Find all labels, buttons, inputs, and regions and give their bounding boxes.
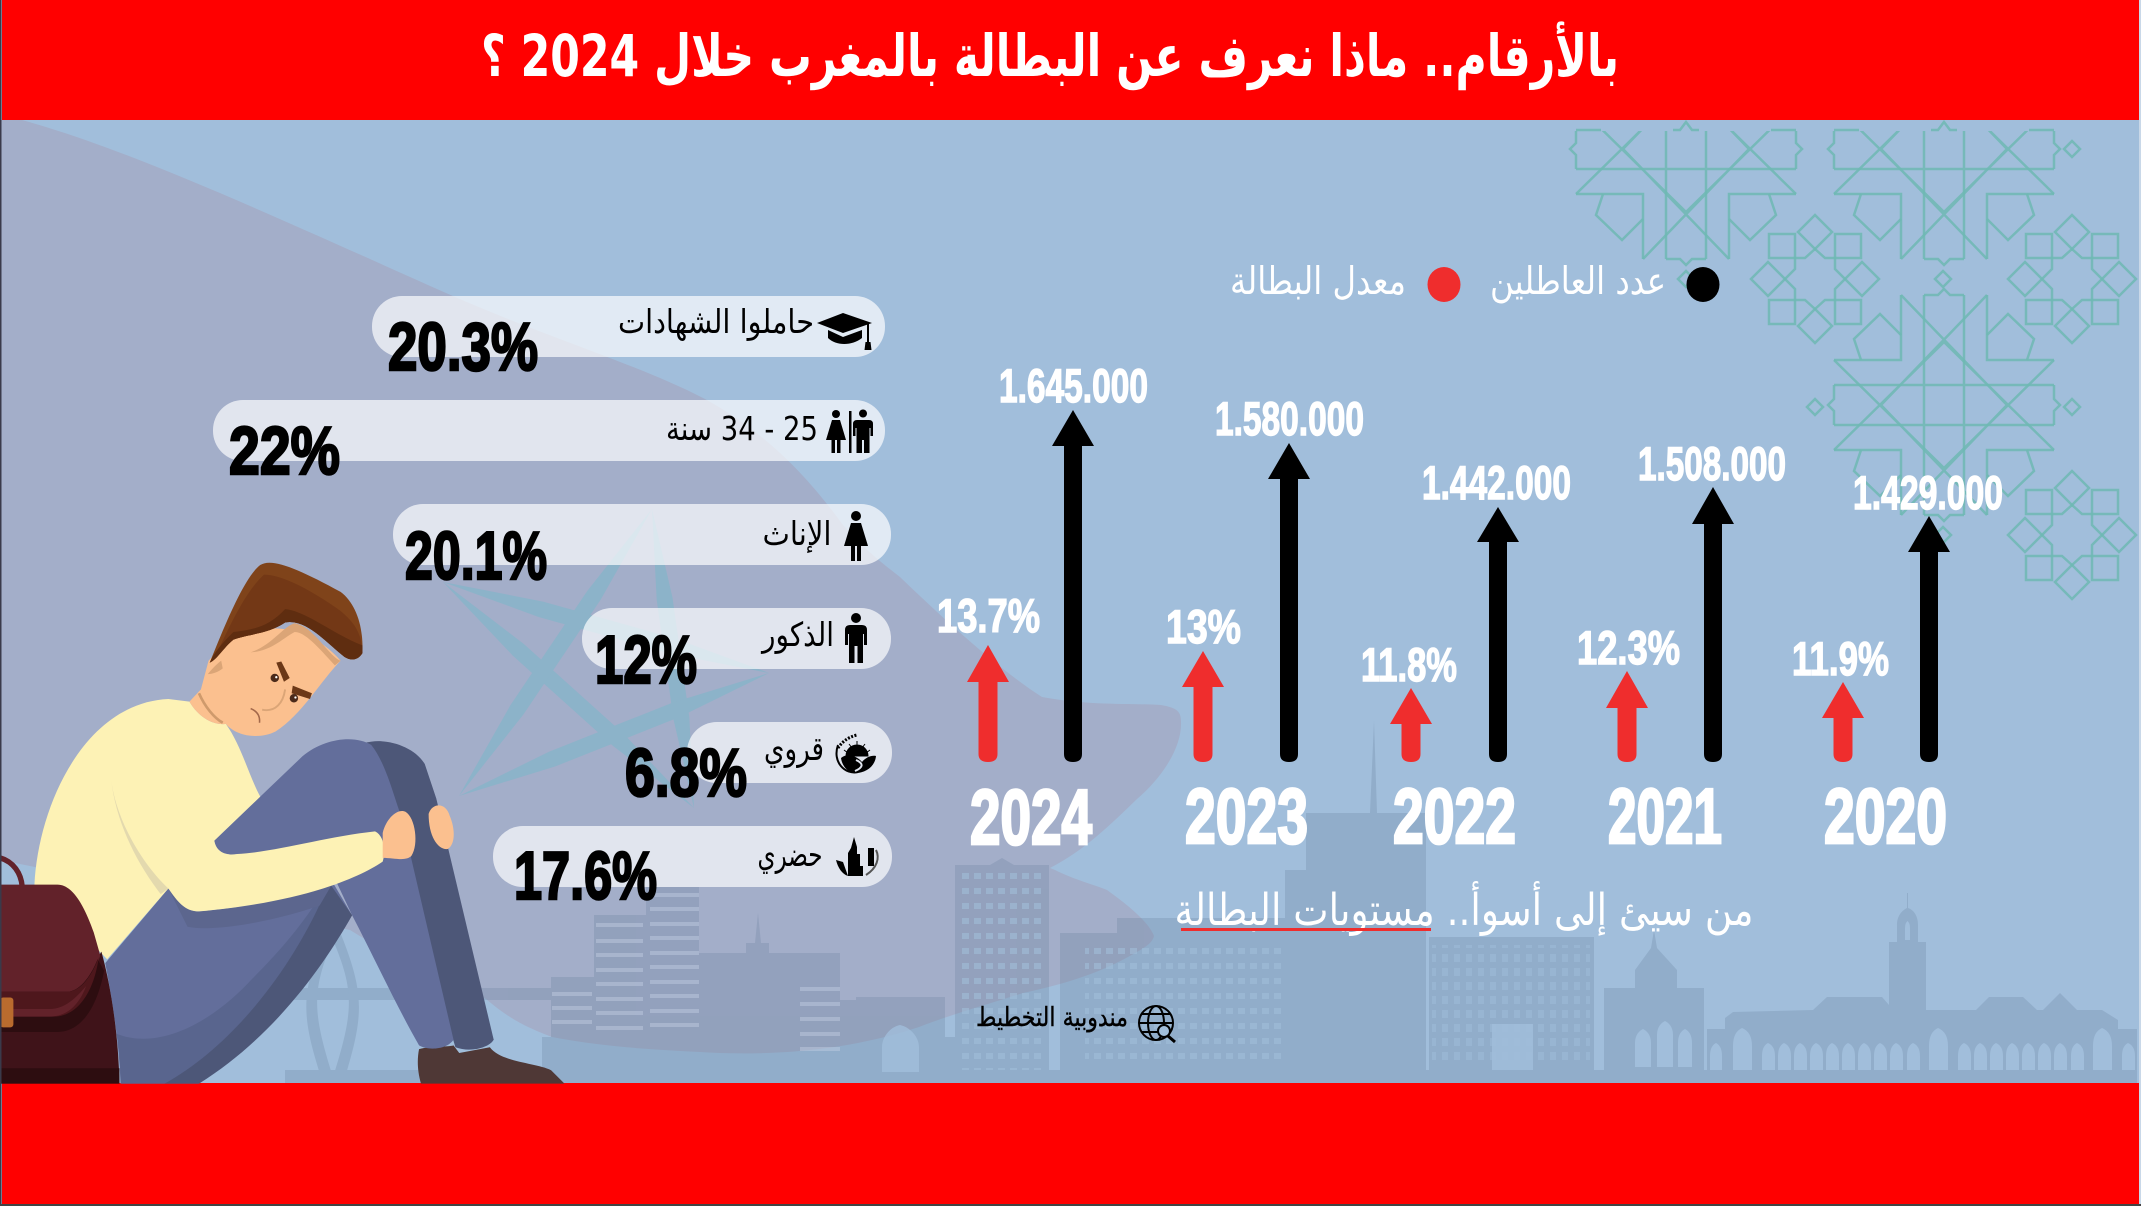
- pill: certificate holders: [372, 296, 885, 385]
- year 2024: 2024: [970, 773, 1092, 861]
- year 2023: 2023: [1185, 772, 1308, 860]
- man illustration: [0, 563, 564, 1084]
- year 2020: 2020: [1824, 772, 1947, 860]
- year 2021: 1.508.000: [1638, 437, 1786, 490]
- year 2022: 11.8%: [1361, 638, 1457, 691]
- pill: rural: [625, 722, 892, 811]
- source label: مندوبية التخطيط: [976, 1003, 1128, 1033]
- year 2022: 2022: [1393, 772, 1516, 860]
- year 2020: 11.9%: [1792, 632, 1889, 685]
- icon: graduation cap: [817, 313, 872, 350]
- head: [189, 628, 341, 736]
- source: [976, 1003, 1175, 1042]
- legend label: unemployed count: عدد العاطلين: [1490, 259, 1666, 304]
- bag strap: [0, 858, 22, 887]
- pill: females: [393, 504, 891, 594]
- moroccan star: [443, 509, 769, 808]
- sweater: [34, 699, 384, 959]
- value: 20.3%: 20.3%: [388, 309, 538, 385]
- label: males: الذكور: [760, 615, 834, 654]
- hands: [383, 811, 415, 859]
- legend dot: unemployed count: [1686, 267, 1720, 302]
- face details: [276, 661, 312, 699]
- year 2021: [1577, 437, 1786, 860]
- label: 25-34 years: 25 - 34 سنة: [666, 409, 818, 448]
- subtitle underline: [1181, 928, 1431, 931]
- legend dot: unemployment rate: [1428, 267, 1460, 302]
- back leg: [365, 741, 494, 1050]
- icon: woman: [844, 511, 868, 561]
- value: 22%: 22%: [229, 413, 340, 489]
- year 2020: 1.429.000: [1853, 466, 2003, 519]
- subtitle: من سيئ إلى أسوأ.. مستويات البطالة: [1174, 881, 1754, 936]
- icon: globe with magnifier: [1139, 1006, 1175, 1042]
- chart: arrows: [937, 359, 2003, 861]
- legend label: unemployment rate: معدل البطالة: [1230, 259, 1406, 303]
- year 2023: 1.580.000: [1215, 392, 1364, 445]
- year 2022: [1361, 456, 1571, 860]
- title: بالأرقام.. ماذا نعرف عن البطالة بالمغرب خلال 2024 ؟: [481, 21, 1619, 91]
- year 2024: 13.7%: [937, 589, 1040, 642]
- header bar: [2, 0, 2139, 120]
- footer bar: [2, 1083, 2139, 1204]
- pills with labels and values: [213, 296, 892, 914]
- year 2024: 1.645.000: [999, 359, 1148, 412]
- value: 6.8%: 6.8%: [625, 735, 747, 811]
- icon: rural landscape: [836, 735, 876, 773]
- flag shape: [0, 120, 1181, 1053]
- torso pants: [105, 883, 352, 1084]
- label: certificate holders: حاملوا الشهادات: [618, 302, 814, 341]
- skyline silhouette: [285, 721, 2137, 1083]
- pill: age 25-34: [213, 400, 885, 489]
- palace arches: [1710, 1028, 2135, 1070]
- value: 20.1%: 20.1%: [405, 518, 547, 594]
- icon: city: [836, 837, 878, 876]
- year 2020: [1792, 466, 2003, 860]
- label: urban: حضري: [758, 835, 822, 874]
- front leg: [214, 739, 453, 1049]
- year 2024: [937, 359, 1148, 861]
- year 2021: 2021: [1608, 772, 1722, 860]
- value: 12%: 12%: [595, 622, 697, 698]
- pill: males: [582, 608, 891, 698]
- icon: woman and man: [826, 410, 873, 453]
- value: 17.6%: 17.6%: [514, 838, 657, 914]
- geometric pattern: [1568, 120, 2138, 600]
- hair: [210, 563, 363, 663]
- bag: [0, 952, 119, 1084]
- year 2021: 12.3%: [1577, 621, 1680, 674]
- label: females: الإناث: [762, 514, 832, 553]
- year 2023: 13%: [1166, 600, 1241, 653]
- label: rural: قروي: [764, 729, 824, 768]
- legend: [1230, 259, 1720, 304]
- icon: man: [845, 613, 867, 663]
- year 2023: [1166, 392, 1364, 860]
- windows: [552, 893, 840, 1051]
- shoes: [418, 1045, 564, 1084]
- year 2022: 1.442.000: [1422, 456, 1571, 509]
- pill: urban: [493, 826, 892, 914]
